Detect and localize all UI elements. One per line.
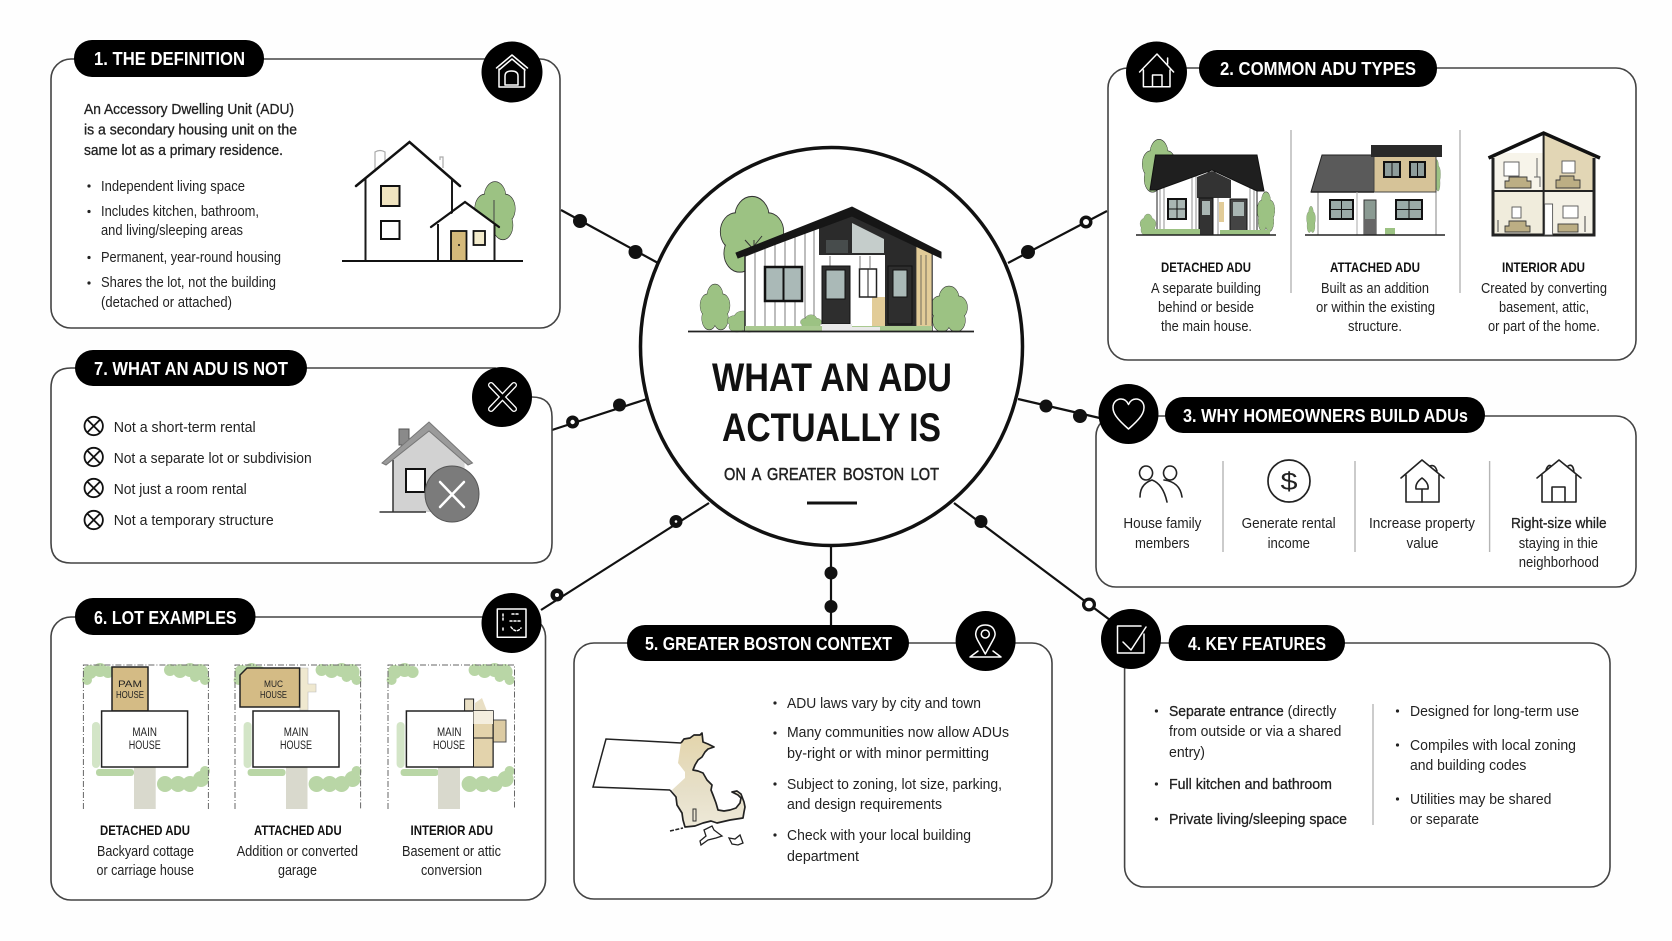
lot: detached: PAM (118, 679, 142, 690)
features: left column: entry) (1169, 744, 1205, 761)
not list (84, 417, 312, 529)
heading (1165, 397, 1485, 433)
lot: interior (387, 663, 515, 809)
type: interior: or part of the home. (1488, 318, 1600, 335)
context bullets: Subject to zoning, lot size, parking, (787, 776, 1002, 793)
heading: 6. LOT EXAMPLES (94, 607, 237, 628)
panel: 7 what an ADU is not (51, 350, 552, 563)
lot: detached (82, 663, 210, 809)
not list: Not a short-term rental (114, 419, 256, 436)
type: detached: DETACHED ADU (1161, 259, 1251, 275)
lot: attached (234, 663, 362, 809)
title (712, 356, 952, 450)
lot: attached: MAIN (284, 727, 308, 739)
heading: 1. THE DEFINITION (94, 48, 245, 69)
icon: house (1126, 42, 1187, 102)
panel outline (51, 617, 546, 900)
context bullets: Many communities now allow ADUs (787, 724, 1009, 741)
heading: 4. KEY FEATURES (1188, 633, 1326, 654)
type: attached (1316, 259, 1435, 335)
panel outline (1108, 68, 1636, 360)
context bullets: department (787, 848, 860, 865)
reason: income: $ (1280, 468, 1298, 496)
reason: right-size: neighborhood (1519, 554, 1599, 571)
connector lines (541, 210, 1110, 625)
central hub (640, 148, 1022, 546)
not list: Not a temporary structure (114, 512, 274, 529)
features: right column: Designed for long-term use (1410, 703, 1579, 720)
hub circle (640, 148, 1022, 546)
context bullets (773, 695, 1009, 865)
bullet list: Shares the lot, not the building (101, 274, 276, 291)
heading: 2. COMMON ADU TYPES (1220, 58, 1416, 79)
lot: attached: HOUSE (260, 690, 287, 701)
reason: right-size: Right-size while (1511, 515, 1607, 532)
reason: income: income (1268, 535, 1310, 552)
bullet list: Permanent, year-round housing (101, 249, 281, 266)
illustration: detached ADU (1136, 139, 1276, 235)
intro text: same lot as a primary residence. (84, 142, 283, 159)
intro text: An Accessory Dwelling Unit (ADU) (84, 101, 294, 118)
bullet list: and living/sleeping areas (101, 222, 243, 239)
type: detached: behind or beside (1158, 299, 1254, 316)
lot: detached: HOUSE (116, 690, 144, 701)
lot: interior: HOUSE (433, 740, 465, 752)
caption: detached: or carriage house (96, 862, 194, 879)
illustration: attached ADU (1305, 145, 1445, 235)
type: detached (1151, 259, 1261, 335)
lot: attached: HOUSE (280, 740, 312, 752)
reason: income: Generate rental (1242, 515, 1336, 532)
heading (75, 350, 307, 386)
heading (1169, 625, 1345, 661)
features: left column (1155, 703, 1347, 828)
icon: map pin (956, 611, 1016, 671)
panel outline (1125, 643, 1610, 887)
illustration: house with x (380, 422, 479, 522)
caption: detached: Backyard cottage (97, 843, 194, 860)
panel outline (1096, 416, 1636, 587)
map: Massachusetts (593, 733, 745, 845)
panel: 2 common ADU types (1108, 42, 1636, 360)
bullet list: Independent living space (101, 178, 245, 195)
reason: family (1123, 466, 1202, 552)
type: attached: structure. (1348, 318, 1402, 335)
type: interior: Created by converting (1481, 280, 1607, 297)
icon: house (482, 42, 542, 102)
type: interior: INTERIOR ADU (1502, 259, 1585, 275)
features: left column: Private living/sleeping space (1169, 811, 1347, 828)
features: right column (1396, 703, 1579, 828)
heading: 7. WHAT AN ADU IS NOT (94, 358, 289, 379)
type: detached: A separate building (1151, 280, 1261, 297)
bullet list: (detached or attached) (101, 294, 232, 311)
caption: detached: DETACHED ADU (100, 822, 190, 838)
heading (1199, 50, 1437, 87)
caption: interior (402, 822, 501, 879)
icon: x mark (472, 367, 532, 427)
heading: 5. GREATER BOSTON CONTEXT (645, 633, 893, 654)
caption: attached: Addition or converted (237, 843, 358, 860)
features: left column: from outside or via a shared (1169, 723, 1341, 740)
features: right column: Compiles with local zoning (1410, 737, 1576, 754)
type: interior (1481, 259, 1607, 335)
lot: interior: MAIN (437, 727, 462, 739)
caption: interior: Basement or attic (402, 843, 501, 860)
caption: attached: ATTACHED ADU (254, 822, 342, 838)
panel outline (574, 643, 1052, 899)
lot: detached: MAIN (132, 727, 157, 739)
intro text: is a secondary housing unit on the (84, 122, 297, 138)
illustration: interior ADU (1488, 133, 1600, 235)
subtitle: ON A GREATER BOSTON LOT (724, 464, 939, 484)
title underline (807, 502, 857, 504)
reason: family: members (1135, 535, 1190, 552)
caption: interior: conversion (421, 862, 482, 879)
type: interior: basement, attic, (1499, 299, 1589, 316)
caption: attached: garage (278, 862, 317, 879)
icon: site plan (482, 593, 542, 653)
features: right column: Utilities may be shared (1410, 791, 1551, 808)
illustration: main house and ADU (342, 142, 523, 261)
caption: interior: INTERIOR ADU (410, 822, 493, 838)
lot: attached: MUC (264, 679, 283, 690)
reason: value: Increase property (1369, 515, 1475, 532)
intro text (84, 101, 297, 159)
panel outline (51, 368, 552, 563)
reason: value: value (1406, 535, 1438, 552)
type: attached: or within the existing (1316, 299, 1435, 316)
title: WHAT AN ADU (712, 356, 952, 400)
bullet list (87, 178, 281, 311)
features: right column: or separate (1410, 811, 1479, 828)
caption: attached (237, 822, 358, 879)
bullet list: Includes kitchen, bathroom, (101, 203, 259, 220)
title: ACTUALLY IS (722, 406, 941, 450)
type: detached: the main house. (1161, 318, 1252, 335)
illustration: modern ADU house (688, 196, 974, 332)
reason: right-size (1511, 460, 1607, 571)
panel outline (51, 59, 560, 328)
heading: 3. WHY HOMEOWNERS BUILD ADUs (1183, 405, 1468, 426)
type: attached: ATTACHED ADU (1330, 259, 1420, 275)
features: left column: Full kitchen and bathroom (1169, 776, 1332, 793)
context bullets: by-right or with minor permitting (787, 745, 989, 762)
heading (627, 625, 909, 661)
reason: value (1369, 460, 1475, 552)
reason: right-size: staying in thie (1519, 535, 1598, 552)
lot: detached: HOUSE (129, 740, 161, 752)
not list: Not a separate lot or subdivision (114, 450, 312, 467)
context bullets: ADU laws vary by city and town (787, 695, 981, 712)
context bullets: and design requirements (787, 796, 942, 813)
reason: family: House family (1123, 515, 1202, 532)
icon: checkbox (1101, 609, 1161, 669)
panel: 6 lot examples (51, 593, 546, 900)
type: attached: Built as an addition (1321, 280, 1429, 297)
heading (74, 40, 264, 77)
reason: income (1242, 460, 1336, 552)
caption: detached (96, 822, 194, 879)
features: left column: Separate entrance (directly (1169, 703, 1337, 720)
context bullets: Check with your local building (787, 827, 971, 844)
panel: 1 the definition (51, 40, 560, 328)
not list: Not just a room rental (114, 481, 247, 498)
icon: heart (1098, 384, 1158, 444)
panel: 4 key features (1101, 609, 1610, 887)
features: right column: and building codes (1410, 757, 1526, 774)
heading (75, 598, 256, 635)
panel: 3 why homeowners build ADUs (1096, 384, 1636, 587)
panel: 5 greater boston context (574, 611, 1052, 899)
